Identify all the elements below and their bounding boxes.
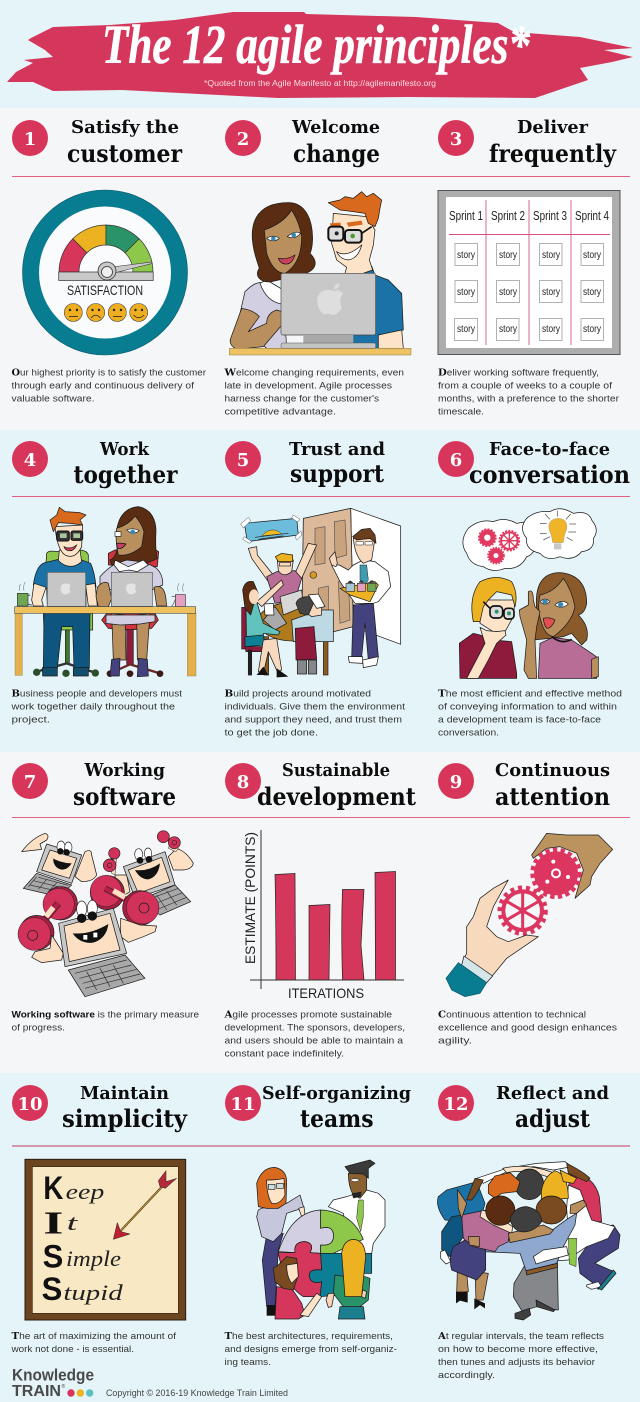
illustration: KISS framed sign: imple	[66, 1246, 121, 1271]
panel: principle 10	[10, 1083, 188, 1355]
description 9	[438, 1010, 617, 1046]
number badge 12	[438, 1085, 474, 1121]
description 1: Our highest priority is to satisfy the customer	[12, 368, 207, 378]
description 6: The most efficient and effective method	[438, 688, 622, 700]
description 6: a development team is face-to-face	[438, 714, 601, 726]
description 3: months, with a preference to the shorter	[438, 394, 620, 404]
laptop	[281, 273, 376, 335]
description 2: late in development. Agile processes	[224, 380, 392, 392]
illustration: KISS framed sign: t	[67, 1210, 79, 1235]
number badge 11: 11	[230, 1094, 256, 1115]
description 4	[10, 688, 182, 726]
number badge 10: 10	[17, 1094, 43, 1115]
description 5: Build projects around motivated	[224, 688, 371, 700]
panel: principle 8	[223, 760, 416, 1060]
heading: Maintain simplicity: simplicity	[62, 1104, 188, 1133]
heading: Reflect and adjust: adjust	[515, 1104, 590, 1133]
number badge 12: 12	[443, 1094, 469, 1115]
heading: Continuous attention: Continuous	[495, 760, 610, 781]
number badge 7	[12, 763, 48, 799]
number badge 3	[438, 120, 474, 156]
description 7: Working software is the primary measure	[12, 1010, 199, 1020]
description 3	[438, 368, 620, 418]
heading: Face-to-face conversation: conversation	[469, 460, 630, 489]
illustration: sprint board: Sprint 3	[533, 208, 567, 223]
title banner brush stroke	[7, 12, 633, 98]
description 3: timescale.	[438, 406, 484, 418]
heading: Reflect and adjust: Reflect and	[496, 1083, 609, 1104]
desk	[229, 348, 411, 355]
illustration: two colleagues at a laptop	[229, 192, 411, 355]
description 8: and users should be able to maintain a	[224, 1036, 404, 1046]
description 6: conversation.	[438, 728, 499, 738]
illustration: team huddle	[437, 1162, 620, 1320]
heading: Self-organizing teams: Self-organizing	[262, 1083, 411, 1104]
heading: Work together: Work	[99, 439, 149, 460]
description 2: Welcome changing requirements, even	[223, 368, 404, 378]
panel: principle 9	[438, 760, 617, 1046]
source note: *Quoted from the Agile Manifesto at http://agilemanifesto.org	[204, 79, 436, 88]
bar chart: estimate points per iteration	[242, 830, 404, 1001]
heading: Working software	[73, 760, 176, 811]
illustration: KISS framed sign: eep	[66, 1179, 104, 1204]
illustration: two colleagues at a desk	[15, 507, 196, 677]
number badge 8	[225, 763, 261, 799]
description 1: through early and continuous delivery of	[12, 380, 194, 392]
number badge 1: 1	[24, 129, 36, 150]
illustration: muscular laptops lifting weights	[18, 831, 193, 997]
heading: Welcome change: change	[293, 139, 380, 168]
description 5: individuals. Give them the environment	[224, 702, 405, 712]
illustration: satisfaction gauge: SATISFACTION	[67, 282, 143, 298]
heading: Maintain simplicity: Maintain	[80, 1083, 169, 1104]
description 12: accordingly.	[438, 1370, 495, 1381]
illustration: two hands fitting gears	[446, 833, 613, 997]
illustration: sprint board: story	[583, 323, 602, 335]
heading: Face-to-face conversation: Face-to-face	[489, 439, 610, 460]
illustration: sprint board: story	[457, 286, 476, 298]
illustration: KISS framed sign: I	[43, 1204, 63, 1240]
number badge 4	[12, 441, 48, 477]
heading: Sustainable development: development	[257, 782, 416, 811]
description 1: valuable software.	[12, 394, 94, 404]
heading: Reflect and adjust	[496, 1083, 609, 1133]
title: The 12 agile principles*	[102, 14, 530, 75]
number badge 9	[438, 763, 474, 799]
description 9: agility.	[438, 1036, 472, 1046]
woman	[240, 283, 287, 348]
panel: principle 7	[12, 760, 199, 1034]
heading: Welcome change: Welcome	[291, 117, 380, 138]
illustration: supportive team and manager	[241, 508, 401, 677]
description 5: to get the job done.	[224, 728, 318, 738]
illustration: sprint board: story	[457, 249, 476, 261]
heading: Continuous attention	[495, 760, 610, 811]
heading: Deliver frequently: frequently	[489, 139, 617, 168]
heading: Sustainable development	[257, 760, 416, 811]
heading: Working software: software	[73, 782, 176, 811]
number badge 6: 6	[450, 450, 462, 471]
heading: Deliver frequently	[489, 117, 617, 168]
description 8: development. The sponsors, developers,	[224, 1022, 405, 1034]
illustration: sprint board: story	[583, 286, 602, 298]
band: principles 10 to 12	[0, 1073, 640, 1402]
heading: Deliver frequently: Deliver	[517, 117, 588, 138]
y axis label: ESTIMATE (POINTS)	[242, 832, 258, 964]
copyright: Copyright © 2016-19 Knowledge Train Limited	[106, 1388, 288, 1399]
number badge 3: 3	[450, 129, 462, 150]
heading: Sustainable development: Sustainable	[282, 760, 390, 781]
heading: Trust and support: Trust and	[289, 439, 385, 460]
number badge 4: 4	[24, 450, 36, 471]
number badge 1	[12, 120, 48, 156]
description 11: The best architectures, requirements,	[224, 1331, 393, 1342]
heading: Maintain simplicity	[62, 1083, 188, 1133]
description 8	[223, 1010, 405, 1060]
description 9: Continuous attention to technical	[438, 1010, 586, 1020]
description 4: work together daily throughout the	[10, 702, 175, 712]
description 2: harness change for the customer's	[224, 394, 379, 404]
band: title header	[0, 0, 640, 108]
illustration: conversation with thought clouds	[459, 509, 598, 678]
number badge 10	[12, 1085, 48, 1121]
description 8: constant pace indefinitely.	[224, 1048, 344, 1060]
illustration: sprint board	[438, 190, 620, 354]
heading: Welcome change	[291, 117, 380, 168]
logo: Knowledge Train	[12, 1366, 94, 1400]
description 3: Deliver working software frequently,	[438, 368, 599, 378]
illustration: satisfaction gauge	[22, 190, 188, 355]
panel: principle 12	[437, 1083, 620, 1381]
description 9: excellence and good design enhances	[438, 1022, 617, 1034]
illustration: sprint board: story	[499, 286, 518, 298]
arrow	[113, 1171, 177, 1239]
description 10: work not done - is essential.	[10, 1344, 134, 1355]
illustration: sprint board: story	[542, 249, 561, 261]
illustration: KISS framed sign	[25, 1159, 186, 1320]
illustration: team assembling a puzzle	[257, 1160, 385, 1319]
illustration: sprint board: Sprint 1	[449, 208, 483, 223]
illustration: KISS framed sign: tupid	[63, 1280, 124, 1305]
heading: Work together	[74, 439, 178, 489]
heading: Trust and support: support	[290, 459, 384, 488]
number badge 2: 2	[237, 129, 249, 150]
band: principles 1 to 3	[0, 108, 640, 430]
description 1	[12, 368, 207, 404]
illustration: sprint board: story	[499, 249, 518, 261]
description 12: At regular intervals, the team reflects	[437, 1331, 604, 1342]
heading: Continuous attention: attention	[495, 782, 610, 811]
description 4: Business people and developers must	[12, 688, 182, 700]
panel: principle 6	[438, 439, 630, 738]
description 8: Agile processes promote sustainable	[223, 1010, 392, 1020]
description 7: of progress.	[12, 1022, 65, 1034]
heading: Working software: Working	[84, 760, 165, 781]
heading: Satisfy the customer: customer	[67, 139, 182, 168]
description 2	[223, 368, 404, 418]
description 5: and support they need, and trust them	[224, 714, 402, 726]
illustration: sprint board: Sprint 4	[575, 208, 609, 223]
illustration: sprint board: story	[583, 249, 602, 261]
description 7	[12, 1010, 199, 1034]
number badge 8: 8	[237, 772, 249, 793]
illustration: sprint board: Sprint 2	[491, 208, 525, 223]
logo: Knowledge Train: TRAIN	[12, 1383, 61, 1400]
number badge 6	[438, 441, 474, 477]
description 6	[438, 688, 622, 738]
description 11	[224, 1331, 397, 1368]
panel: principle 2	[223, 117, 411, 418]
illustration: KISS framed sign: K	[43, 1170, 63, 1206]
number badge 5	[225, 441, 261, 477]
heading: Work together: together	[74, 460, 178, 489]
illustration: sprint board: story	[457, 323, 476, 335]
description 2: competitive advantage.	[224, 406, 336, 418]
man	[345, 266, 403, 348]
logo: Knowledge Train: Knowledge	[12, 1366, 94, 1384]
panel: principle 11	[224, 1083, 411, 1368]
x axis label: ITERATIONS	[288, 985, 364, 1001]
description 10	[10, 1331, 176, 1355]
number badge 11	[225, 1085, 261, 1121]
heading: Trust and support	[289, 439, 385, 488]
description 4: project.	[12, 714, 50, 726]
panel: principle 4	[10, 439, 196, 726]
heading: Satisfy the customer	[67, 117, 182, 168]
description 12	[437, 1331, 604, 1381]
band: principles 7 to 9	[0, 752, 640, 1073]
heading: Face-to-face conversation	[469, 439, 630, 489]
heading: Self-organizing teams	[262, 1083, 411, 1133]
illustration: KISS framed sign: S	[43, 1238, 63, 1274]
logo: Knowledge Train: ®	[62, 1383, 66, 1390]
number badge 7: 7	[24, 772, 36, 793]
description 12: on how to become more effective,	[438, 1344, 598, 1355]
standing manager with tray of mugs	[329, 528, 391, 668]
number badge 9: 9	[450, 772, 462, 793]
band: principles 4 to 6	[0, 430, 640, 752]
panel: principle 5	[224, 439, 405, 738]
description 11: and designs emerge from self-organiz-	[224, 1344, 397, 1355]
description 10: The art of maximizing the amount of	[12, 1331, 176, 1342]
description 12: then tunes and adjusts its behavior	[438, 1357, 596, 1368]
number badge 5: 5	[237, 450, 249, 471]
description 3: from a couple of weeks to a couple of	[438, 380, 612, 392]
heading: Self-organizing teams: teams	[300, 1104, 374, 1133]
number badge 2	[225, 120, 261, 156]
description 5	[224, 688, 405, 738]
description 6: of conveying information to and within	[438, 702, 617, 712]
illustration: sprint board: story	[542, 286, 561, 298]
panel: principle 1	[12, 117, 207, 404]
heading: Satisfy the customer: Satisfy the	[71, 117, 179, 138]
illustration: KISS framed sign: S	[42, 1271, 62, 1307]
illustration: sprint board: story	[542, 323, 561, 335]
panel: principle 3	[438, 117, 620, 418]
illustration: sprint board: story	[499, 323, 518, 335]
description 11: ing teams.	[224, 1357, 271, 1368]
